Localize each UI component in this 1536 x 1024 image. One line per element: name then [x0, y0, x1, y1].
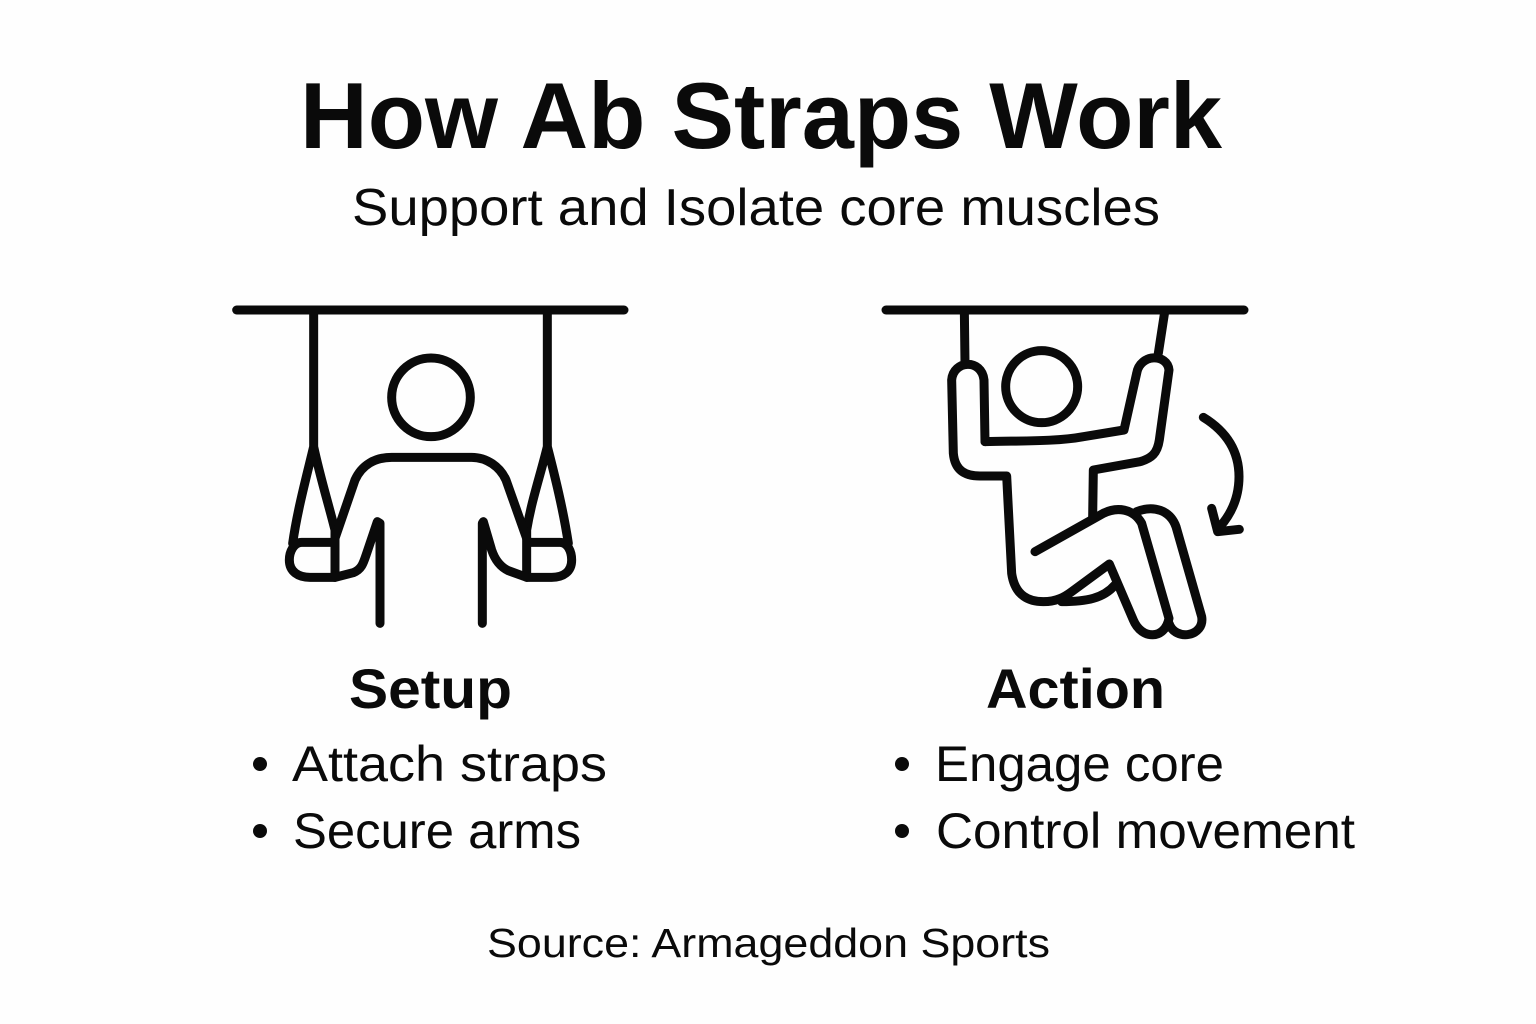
straps	[964, 310, 1165, 363]
torso and raised arm	[985, 358, 1169, 517]
list: setup: Secure arms	[293, 803, 581, 859]
heading: action: Action	[986, 657, 1165, 720]
second leg	[1137, 509, 1202, 635]
bar	[237, 296, 624, 323]
list: action: Engage core	[935, 736, 1224, 792]
body outline	[952, 364, 1169, 635]
icon: action, person raising knees while hanging	[886, 310, 1244, 635]
list: setup	[253, 736, 607, 859]
list: action	[895, 736, 1355, 859]
left strap	[289, 310, 335, 577]
torso and arms	[335, 457, 527, 538]
right strap	[527, 310, 572, 577]
source: Source: Armageddon Sports	[487, 920, 1050, 966]
head	[1006, 351, 1078, 423]
heading: setup: Setup	[349, 657, 512, 720]
list: action: Control movement	[936, 803, 1355, 859]
bar	[886, 296, 1244, 323]
subtitle: Support and Isolate core muscles	[352, 179, 1160, 237]
head	[392, 358, 470, 437]
title: How Ab Straps Work	[300, 63, 1223, 168]
icon: setup, person with arms in hanging straps	[237, 310, 624, 623]
list: setup: Attach straps	[292, 736, 607, 792]
calf	[1062, 585, 1115, 602]
arrow: rotation	[1203, 417, 1239, 532]
